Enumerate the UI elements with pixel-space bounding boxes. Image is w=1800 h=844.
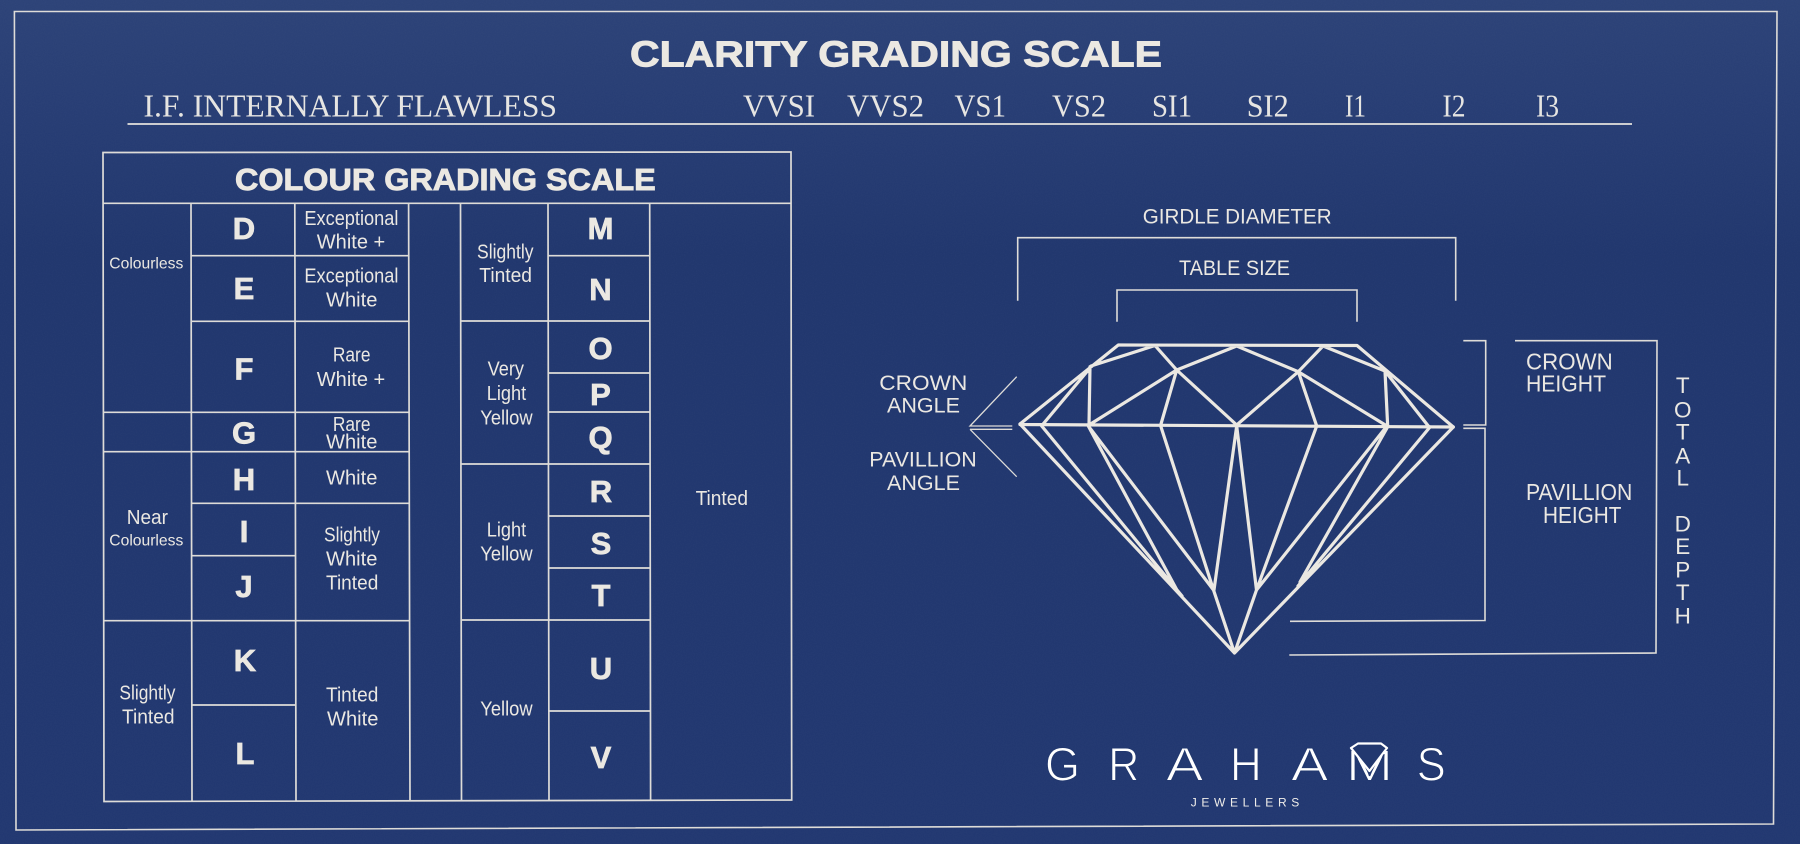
icon: diamond in logo M — [1351, 744, 1387, 771]
grade letters D to L — [232, 211, 257, 771]
panel: colour grading scale table — [103, 152, 792, 802]
logo: grahams jewellers — [1045, 738, 1446, 810]
clarity scale row: I2 — [1442, 88, 1466, 124]
category labels right column: Yellow — [480, 544, 533, 566]
grade letters D to L: G — [232, 415, 256, 450]
colour descriptions left column — [304, 208, 398, 731]
bracket: girdle diameter — [1018, 238, 1456, 301]
logo: grahams jewellers: H — [1230, 738, 1262, 791]
colour descriptions left column: Exceptional — [304, 265, 398, 287]
label: total depth vertical: H — [1675, 603, 1691, 628]
category labels right column: Yellow — [480, 699, 533, 721]
grade letters D to L: E — [234, 271, 254, 306]
colour descriptions left column: Tinted — [326, 573, 378, 595]
grade letters M to V — [588, 211, 613, 775]
grade letters M to V: P — [590, 377, 611, 412]
label: pavillion height — [1526, 479, 1632, 528]
colour descriptions left column: White — [326, 431, 377, 453]
clarity scale row: VS2 — [1052, 88, 1106, 124]
label: girdle diameter: GIRDLE DIAMETER — [1143, 205, 1332, 228]
label: pavillion height: PAVILLION — [1526, 479, 1632, 505]
label: total depth vertical: P — [1675, 557, 1690, 582]
colour descriptions left column: Exceptional — [304, 208, 398, 230]
label: total depth vertical: T — [1676, 580, 1690, 605]
grade letters D to L: J — [235, 569, 253, 604]
diamond crown — [1020, 345, 1453, 427]
grade letters M to V: T — [592, 578, 611, 613]
colour descriptions left column: Rare — [333, 414, 370, 436]
label: crown angle — [879, 372, 967, 418]
category labels right column: Light — [487, 383, 527, 405]
colour descriptions left column: White — [326, 290, 377, 312]
grade letters M to V: Q — [588, 420, 613, 455]
category labels right column: Light — [487, 520, 527, 542]
logo: grahams jewellers: R — [1108, 738, 1139, 791]
grade letters M to V: U — [590, 651, 612, 686]
logo: grahams jewellers: M — [1346, 742, 1393, 791]
logo: grahams jewellers: A — [1291, 738, 1329, 791]
clarity scale row: VS1 — [954, 88, 1006, 124]
label: total depth vertical: T — [1676, 373, 1690, 398]
angle indicator lines — [970, 377, 1017, 477]
label: crown height — [1526, 348, 1613, 397]
clarity scale row: SI2 — [1247, 88, 1289, 124]
grade letters D to L: L — [236, 736, 254, 771]
label: total depth vertical: L — [1676, 466, 1689, 491]
logo: grahams jewellers: G — [1045, 738, 1080, 791]
label: total depth vertical: D — [1675, 512, 1691, 537]
colour descriptions left column: White + — [317, 369, 385, 391]
label: total depth vertical: T — [1676, 419, 1690, 444]
colour descriptions left column: Slightly — [324, 525, 380, 547]
clarity scale row: VVSI — [743, 88, 815, 124]
clarity scale row: SI1 — [1152, 88, 1192, 124]
title: clarity grading scale: CLARITY GRADING SCALE — [630, 34, 1162, 74]
grade letters D to L: D — [233, 211, 255, 246]
grade letters M to V: O — [588, 331, 613, 366]
bracket: table size — [1117, 290, 1357, 322]
label: total depth vertical: E — [1675, 534, 1690, 559]
clarity scale row: I1 — [1345, 88, 1366, 124]
category labels left column: Colourless — [109, 255, 183, 272]
category labels left column: Slightly — [119, 682, 175, 704]
logo: grahams jewellers: A — [1166, 738, 1204, 791]
category labels right column: Tinted — [696, 488, 748, 510]
category labels left column: Near — [127, 507, 168, 529]
label: table size: TABLE SIZE — [1179, 257, 1290, 280]
grade letters D to L: F — [235, 351, 253, 386]
bracket: crown height — [1463, 341, 1486, 425]
grade letters M to V: S — [591, 526, 611, 561]
clarity scale row: VVS2 — [847, 88, 924, 124]
grade letters M to V: N — [589, 272, 612, 307]
category labels right column: Yellow — [480, 407, 533, 429]
label: total depth vertical — [1674, 373, 1691, 628]
clarity scale row: I.F. INTERNALLY FLAWLESS — [144, 88, 557, 124]
clarity scale row — [128, 88, 1632, 124]
diagram: diamond proportions — [869, 205, 1691, 655]
label: pavillion angle: PAVILLION — [869, 449, 977, 472]
label: pavillion height: HEIGHT — [1543, 502, 1621, 528]
label: crown angle: CROWN — [879, 372, 967, 395]
colour descriptions left column: White + — [317, 232, 385, 254]
category labels right column — [477, 241, 748, 721]
colour descriptions left column: Rare — [333, 345, 370, 367]
grade letters M to V: R — [590, 474, 612, 509]
label: crown angle: ANGLE — [887, 395, 960, 418]
label: pavillion angle: ANGLE — [887, 472, 960, 495]
label: total depth vertical: A — [1675, 443, 1690, 468]
category labels right column: Very — [488, 359, 524, 381]
label: pavillion angle — [869, 449, 977, 495]
logo: grahams jewellers: S — [1417, 738, 1446, 791]
grade letters D to L: H — [233, 462, 255, 497]
diamond pavilion — [1020, 424, 1453, 653]
category labels left column: Colourless — [109, 532, 183, 549]
colour descriptions left column: White — [326, 548, 377, 570]
grade letters M to V: M — [588, 211, 613, 246]
category labels right column: Tinted — [479, 265, 532, 287]
bracket: total depth — [1289, 341, 1657, 655]
colour descriptions left column: White — [326, 467, 377, 489]
category labels left column: Tinted — [122, 707, 174, 729]
logo: grahams jewellers: JEWELLERS — [1191, 796, 1299, 810]
category labels left column — [109, 255, 183, 729]
colour descriptions left column: Tinted — [326, 684, 378, 706]
label: crown height: CROWN — [1526, 348, 1613, 374]
clarity scale row: I3 — [1536, 88, 1559, 124]
colour descriptions left column: White — [327, 709, 378, 731]
grade letters M to V: V — [591, 740, 612, 775]
table heading: COLOUR GRADING SCALE — [235, 162, 656, 197]
grade letters D to L: I — [240, 514, 248, 549]
category labels right column: Slightly — [477, 241, 534, 263]
grade letters D to L: K — [234, 643, 257, 678]
label: crown height: HEIGHT — [1526, 371, 1606, 397]
bracket: pavillion height — [1290, 428, 1485, 621]
label: total depth vertical: O — [1674, 397, 1691, 422]
